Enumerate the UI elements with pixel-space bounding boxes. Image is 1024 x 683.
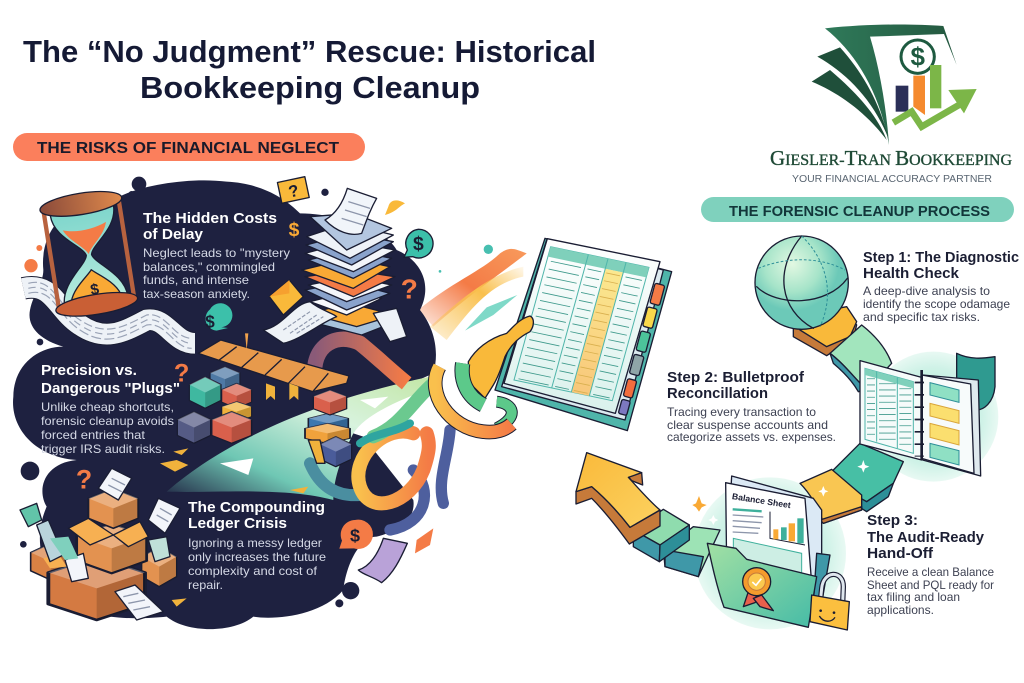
logo mark: $ — [910, 42, 925, 72]
ledger cover — [495, 238, 672, 431]
ribbon: tangled streamers — [310, 383, 450, 530]
halo behind folder — [694, 477, 846, 629]
icon: smiling padlock — [810, 574, 849, 630]
text: the hidden costs of delay: of Delay — [143, 226, 204, 243]
panel: risks of financial neglect — [13, 133, 527, 629]
central ledger held by hand — [435, 238, 672, 432]
icon: balance sheet document — [726, 476, 822, 600]
text: precision vs. dangerous plugs: forced entries that — [41, 428, 146, 442]
text: precision vs. dangerous plugs: Unlike cheap shortcuts, — [41, 400, 174, 414]
glowing road — [167, 377, 435, 500]
text: step 2: categorize assets vs. expenses. — [667, 430, 836, 444]
text: the compounding ledger crisis: only increases the future — [188, 550, 326, 564]
receipts on stack — [263, 188, 407, 343]
icon: hourglass — [38, 187, 139, 321]
text: step 1: identify the scope odamage — [863, 297, 1010, 311]
text: the compounding ledger crisis: The Compounding — [188, 499, 325, 516]
ledger table — [514, 247, 649, 401]
wooden bridge and blocks — [177, 333, 352, 467]
text: step 1: A deep-dive analysis to — [863, 284, 990, 298]
text: step 3: applications. — [867, 603, 934, 617]
paper stack — [302, 213, 400, 335]
title — [23, 34, 596, 105]
logo: Giesler-Tran Bookkeeping — [770, 25, 1012, 185]
text: step 1: Health Check — [863, 265, 960, 282]
logo mark — [812, 25, 977, 145]
text: the compounding ledger crisis: Ledger Crisis — [188, 515, 287, 532]
text: precision vs. dangerous plugs: trigger IRS audit risks. — [41, 442, 165, 456]
ledger index tabs — [618, 283, 665, 416]
box pile: ? — [76, 464, 92, 494]
heading pill: risks — [13, 133, 365, 161]
icon: question and dollar symbols: $ — [205, 311, 215, 331]
icon: balance sheet document: Balance Sheet — [731, 491, 792, 510]
text: step 2: Tracing every transaction to — [667, 405, 816, 419]
text: the hidden costs of delay: tax-season anxiety. — [143, 287, 250, 301]
illustration: dark cloud with clutter — [13, 177, 527, 629]
flame streaks — [418, 249, 527, 340]
heading pill: forensic: THE FORENSIC CLEANUP PROCESS — [729, 203, 990, 220]
halo behind notebook — [868, 352, 998, 482]
icon: question and dollar symbols: ? — [287, 181, 301, 201]
icon: crystal globe — [755, 236, 848, 329]
text: step 3: Receive a clean Balance — [867, 565, 994, 579]
text: step 3: tax filing and loan — [867, 590, 960, 604]
icon: open notebook — [860, 353, 995, 476]
text: precision vs. dangerous plugs — [41, 362, 180, 456]
process illustration — [576, 236, 998, 630]
text: step 1 — [863, 249, 1019, 324]
sparkles — [692, 460, 869, 525]
text: precision vs. dangerous plugs: Dangerous "Plugs" — [41, 380, 180, 397]
panel: forensic cleanup process — [576, 197, 1019, 630]
text: step 3: Sheet and PQL ready for — [867, 578, 994, 592]
heading pill: risks: THE RISKS OF FINANCIAL NEGLECT — [37, 140, 339, 157]
icons: lower dollar bubble and purple receipt — [160, 448, 433, 607]
icon: envelope — [269, 280, 303, 315]
text: precision vs. dangerous plugs: Precision vs. — [41, 362, 137, 379]
icon: question and dollar symbols: ? — [401, 273, 418, 304]
icon: question and dollar symbols: ? — [174, 360, 189, 388]
title: Bookkeeping Cleanup — [140, 70, 480, 105]
company name: GIESLER-TRAN BOOKKEEPING — [770, 146, 1012, 170]
dark cloud — [13, 180, 436, 629]
text: step 2: Reconcillation — [667, 385, 768, 402]
text: the compounding ledger crisis: Ignoring a messy ledger — [188, 536, 322, 550]
curved arrow track — [576, 307, 903, 577]
title: The “No Judgment” Rescue: Historical — [23, 34, 596, 69]
heading pill: forensic — [701, 197, 1014, 222]
text: the compounding ledger crisis: complexity and cost of — [188, 564, 318, 578]
icons: lower dollar bubble and purple receipt: $ — [350, 526, 360, 546]
icon: question and dollar symbols: $ — [413, 234, 424, 255]
text: step 1: and specific tax risks. — [863, 310, 980, 324]
icon: hourglass: $ — [89, 281, 101, 299]
text: step 2 — [667, 369, 836, 444]
text: step 2: Step 2: Bulletproof — [667, 369, 805, 386]
box pile — [20, 464, 180, 620]
text: the hidden costs of delay: Neglect leads to "mystery — [143, 246, 290, 260]
text: the hidden costs of delay: funds, and intense — [143, 273, 249, 287]
text: step 3: Hand-Off — [867, 545, 934, 562]
teal streak — [465, 295, 517, 331]
cuff ribbons — [435, 363, 512, 432]
ribbon: arch — [315, 339, 407, 387]
receipt: long left strip — [23, 282, 195, 348]
text: step 2: clear suspense accounts and — [667, 418, 828, 432]
text: step 3: The Audit-Ready — [867, 529, 985, 546]
text: step 1: Step 1: The Diagnostic — [863, 249, 1019, 266]
text: the hidden costs of delay: balances," commingled — [143, 260, 275, 274]
scattered dots — [20, 177, 359, 607]
text: step 3 — [867, 512, 994, 617]
icon: question and dollar symbols — [174, 177, 433, 388]
icon: folder with rosette — [707, 543, 830, 627]
icon: question and dollar symbols: $ — [289, 220, 300, 241]
ledger page — [504, 239, 660, 413]
text: the hidden costs of delay — [143, 210, 290, 301]
text: the hidden costs of delay: The Hidden Costs — [143, 210, 277, 227]
tagline: YOUR FINANCIAL ACCURACY PARTNER — [792, 173, 992, 185]
text: step 3: Step 3: — [867, 512, 918, 529]
text: the compounding ledger crisis — [188, 499, 326, 592]
hand — [468, 316, 533, 398]
text: precision vs. dangerous plugs: forensic cleanup avoids — [41, 414, 174, 428]
text: the compounding ledger crisis: repair. — [188, 578, 223, 592]
